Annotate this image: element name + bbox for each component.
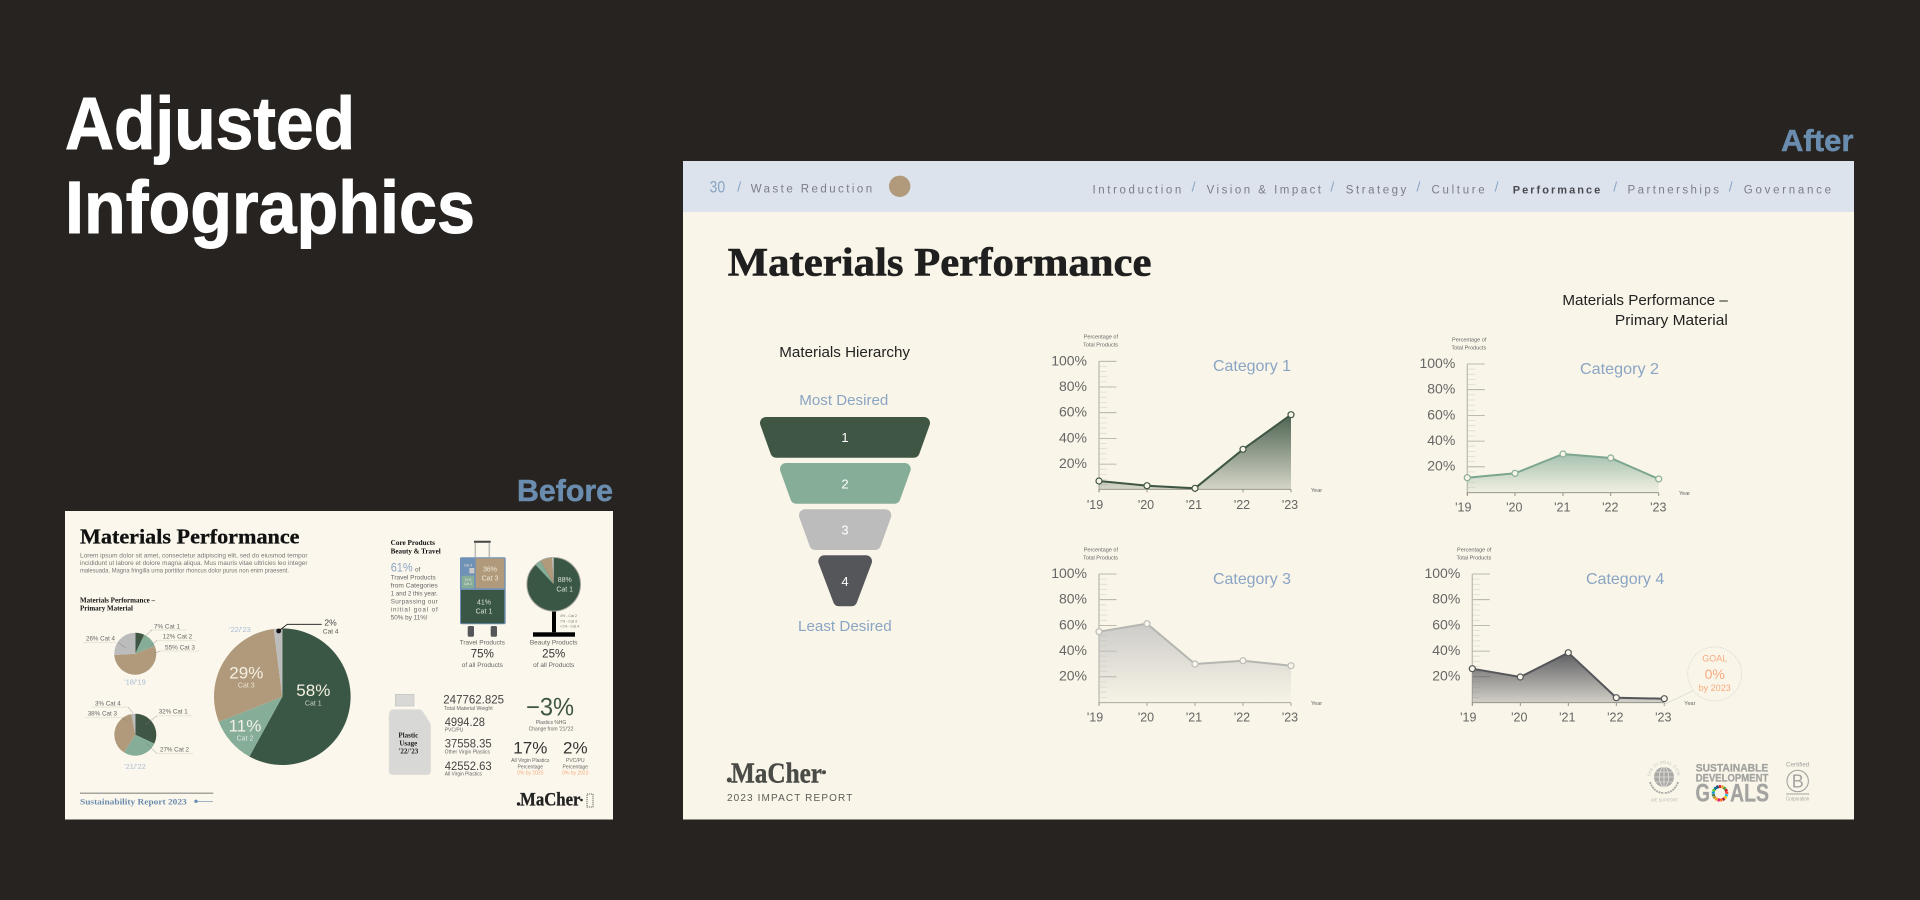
funnel level 1	[766, 423, 924, 452]
line chart: category 1: '21	[1186, 498, 1202, 512]
line chart: category 2: '21	[1554, 501, 1570, 515]
line chart: category 3: '21	[1186, 711, 1202, 725]
plastic percentages: 17%	[513, 738, 547, 757]
line chart: category 2: Category 2	[1580, 361, 1659, 378]
plastic statistics: Other Virgin Plastics	[445, 750, 491, 756]
pie chart: 21/22: 27% Cat 2	[160, 747, 189, 754]
line chart: category 4: 60%	[1432, 616, 1460, 632]
navigation: /	[1330, 178, 1334, 194]
icon: mirror chart	[527, 558, 580, 669]
pie chart: 18/19: '18/'19	[124, 678, 146, 687]
plastic change statistic: −3%	[526, 693, 574, 721]
navigation: Vision & Impact	[1207, 184, 1322, 196]
icon: suitcase chart: 75%	[471, 649, 494, 661]
line chart: category 4: '22	[1607, 711, 1623, 725]
plastic percentages: Percentage	[563, 764, 588, 770]
icon: mirror chart: 7% - Cat 3	[560, 619, 577, 623]
logo: certified b corporation: Corporation	[1786, 796, 1809, 802]
line chart: category 1: 20%	[1059, 455, 1087, 471]
core products text: 61%	[391, 561, 413, 575]
after heading: Materials Performance	[728, 240, 1152, 285]
plastic statistics: 247762.825	[443, 693, 504, 707]
plastic statistics: Total Material Weight	[444, 706, 493, 712]
core products text: Core Products	[391, 539, 435, 547]
core products text: 1 and 2 this year.	[391, 590, 438, 597]
line chart: category 2: Year	[1679, 491, 1690, 497]
logo: global compact: THE GLOBAL COMPACT	[1648, 760, 1680, 777]
line chart: category 4: 100%	[1424, 565, 1460, 581]
header bar: Waste Reduction	[751, 184, 872, 196]
icon: mirror chart: 88%	[558, 577, 572, 584]
navigation	[1092, 178, 1831, 196]
logo: sustainable development goals: ALS	[1730, 779, 1769, 807]
pie chart: 18/19: 12% Cat 2	[163, 634, 193, 641]
materials hierarchy funnel	[766, 344, 924, 635]
icon: mirror chart: <1% - Cat 4	[560, 625, 579, 629]
line chart: category 2: 20%	[1427, 458, 1455, 474]
logo: certified b corporation: Certified	[1786, 762, 1810, 769]
navigation: Strategy	[1346, 184, 1407, 196]
line chart: category 1: 100%	[1051, 352, 1087, 368]
plastic statistics: 42552.63	[445, 759, 492, 773]
line chart: category 2	[1419, 337, 1690, 515]
logo: sustainable development goals: SUSTAINABLE	[1696, 763, 1768, 775]
primary material heading: Primary Material	[1615, 312, 1728, 329]
line chart: category 1: '20	[1138, 498, 1154, 512]
primary material heading: Materials Performance –	[1562, 292, 1728, 309]
pie chart: 21/22: '21/'22	[124, 762, 146, 771]
core products text: of	[415, 567, 421, 574]
icon: mirror chart: 4% - Cat 2	[560, 614, 577, 618]
pie chart: 22/23: Cat 4	[323, 628, 339, 635]
line chart: category 2: Total Products	[1451, 345, 1487, 351]
plastic percentages	[511, 738, 589, 777]
funnel level 3: 3	[841, 523, 849, 538]
logo: global compact	[1648, 760, 1680, 802]
pie chart: 22/23: 2%	[324, 618, 337, 628]
core products text: initial goal of	[391, 607, 438, 614]
header bar: /	[737, 178, 741, 194]
callout: goal	[1663, 647, 1742, 705]
line chart: category 1: '19	[1087, 498, 1103, 512]
navigation: Partnerships	[1628, 184, 1719, 196]
icon: mirror chart: of all Products	[533, 662, 575, 669]
after logo	[727, 758, 852, 804]
callout: goal: 0%	[1705, 666, 1725, 682]
most desired label: Most Desired	[799, 392, 888, 409]
line chart: category 3: '20	[1138, 711, 1154, 725]
line chart: category 3: 60%	[1059, 616, 1087, 632]
navigation: /	[1613, 178, 1617, 194]
pie chart: 18/19: 26% Cat 4	[86, 636, 115, 643]
icon: suitcase chart: Cat 4	[464, 564, 472, 568]
line chart: category 1: Percentage of	[1084, 335, 1118, 341]
line chart: category 2: 60%	[1427, 406, 1455, 422]
line chart: category 1: '22	[1234, 498, 1250, 512]
icon: sdg wheel	[1712, 785, 1728, 801]
line chart: category 4: Year	[1684, 701, 1696, 707]
line chart: category 2: 40%	[1427, 432, 1455, 448]
pie chart: 22/23: '22/'23	[229, 625, 251, 634]
before intro text: incididunt ut labore et dolore magna aliqua. Mus mauris vitae ultricies leo integer	[80, 560, 308, 567]
plastic change statistic: Plastics %HG	[536, 720, 566, 726]
least desired label: Least Desired	[798, 618, 892, 635]
core products text: 50% by 11%!	[391, 614, 428, 621]
callout: goal: by 2023	[1699, 683, 1731, 693]
icon: section dot	[889, 176, 910, 197]
line chart: category 1: 60%	[1059, 404, 1087, 420]
icon: mirror chart: Cat 1	[556, 587, 573, 594]
line chart: category 3: '19	[1087, 711, 1103, 725]
logo: certified b corporation: B	[1792, 772, 1804, 792]
pie chart: 22/23: Cat 1	[305, 700, 322, 707]
plastic percentages: 0% by 2025	[517, 771, 544, 777]
navigation: Culture	[1432, 184, 1485, 196]
line chart: category 3	[1051, 547, 1322, 725]
core products text	[391, 539, 441, 621]
navigation: /	[1729, 178, 1733, 194]
pie chart: 21/22	[85, 700, 193, 771]
before heading: Materials Performance	[80, 524, 300, 548]
line chart: category 4: '19	[1460, 711, 1476, 725]
navigation: /	[1192, 178, 1196, 194]
after logo: MaCher	[731, 758, 822, 789]
line chart: category 3: 40%	[1059, 642, 1087, 658]
pie chart: 18/19: 7% Cat 1	[154, 623, 180, 630]
line chart: category 3: Category 3	[1213, 571, 1291, 588]
callout: goal: GOAL	[1702, 654, 1727, 664]
primary material subheading: Primary Material	[80, 605, 133, 613]
line chart: category 4: 80%	[1432, 590, 1460, 606]
after logo: 2023 IMPACT REPORT	[727, 793, 852, 804]
primary material subheading: Materials Performance –	[80, 597, 155, 605]
before intro text	[80, 552, 308, 574]
heading: after: After	[1781, 123, 1854, 158]
logo: sustainable development goals: DEVELOPMENT	[1696, 773, 1769, 785]
pie chart: 22/23	[214, 618, 351, 765]
plastic percentages: Percentage	[518, 764, 543, 770]
line chart: category 4	[1424, 547, 1696, 725]
funnel level 2	[786, 469, 905, 498]
icon: mirror chart: Beauty Products	[530, 640, 578, 647]
icon: mirror chart: 25%	[542, 649, 565, 661]
primary material subheading	[80, 597, 155, 613]
line chart: category 1: 80%	[1059, 378, 1087, 394]
navigation: /	[1416, 178, 1420, 194]
header bar: 30	[710, 178, 725, 197]
icon: suitcase chart	[460, 542, 506, 669]
navigation: Governance	[1744, 184, 1831, 196]
line chart: category 3: '22	[1234, 711, 1250, 725]
plastic statistics: All Virgin Plastics	[445, 772, 482, 778]
line chart: category 4: 20%	[1432, 668, 1460, 684]
icon: suitcase chart: of all Products	[462, 662, 504, 669]
plastic percentages: 2%	[563, 738, 588, 757]
core products text: Surpassing our	[391, 598, 438, 605]
line chart: category 4: '21	[1559, 711, 1575, 725]
line chart: category 1: '23	[1282, 498, 1298, 512]
pie chart: 22/23: Cat 2	[237, 736, 253, 743]
line chart: category 4: '20	[1511, 711, 1527, 725]
plastic percentages: 0% by 2023	[562, 771, 589, 777]
funnel heading: Materials Hierarchy	[779, 344, 911, 361]
logo: certified b corporation	[1786, 762, 1810, 802]
line chart: category 1: 40%	[1059, 429, 1087, 445]
icon: suitcase chart: 11%	[465, 578, 471, 582]
pie chart: 18/19	[83, 623, 199, 687]
pie chart: 18/19: 55% Cat 3	[165, 644, 196, 651]
plastic statistics: 4994.28	[445, 715, 485, 729]
navigation: Introduction	[1092, 184, 1181, 196]
line chart: category 1	[1051, 335, 1322, 512]
line chart: category 2: 100%	[1419, 355, 1455, 371]
title: Adjusted	[65, 82, 355, 165]
line chart: category 4: Total Products	[1456, 555, 1492, 561]
plastic statistics: PVC/PU	[445, 728, 464, 734]
logo: global compact: WE SUPPORT	[1651, 797, 1678, 802]
plastic percentages: All Virgin Plastics	[511, 758, 550, 764]
funnel level 2: 2	[841, 477, 849, 492]
before footer: Sustainability Report 2023	[80, 798, 187, 807]
core products text: from Categories	[391, 582, 438, 590]
line chart: category 4: 40%	[1432, 642, 1460, 658]
funnel level 4: 4	[841, 574, 849, 589]
icon: suitcase chart: 36%	[483, 566, 497, 573]
logo: sustainable development goals	[1696, 763, 1769, 807]
header bar	[683, 161, 1854, 212]
pie chart: 22/23: 11%	[229, 717, 261, 736]
pie chart: 21/22: 32% Cat 1	[159, 708, 188, 715]
navigation: /	[1495, 178, 1499, 194]
before intro text: Lorem ipsum dolor sit amet, consectetur adipiscing elit, sed do eiusmod tempor	[80, 552, 308, 559]
icon: plastic bottle: Usage	[399, 739, 417, 747]
before logo: MaCher	[520, 790, 581, 811]
funnel level 3	[805, 515, 885, 544]
plastic statistics	[443, 693, 504, 778]
icon: suitcase chart: Travel Products	[460, 640, 506, 647]
before footer	[80, 793, 213, 807]
plastic change statistic	[526, 693, 574, 733]
heading: before: Before	[517, 473, 613, 508]
icon: suitcase chart: Cat 1	[476, 609, 492, 616]
line chart: category 2: 80%	[1427, 380, 1455, 396]
line chart: category 3: 80%	[1059, 590, 1087, 606]
icon: suitcase chart: Cat 3	[482, 575, 498, 582]
title	[65, 82, 475, 249]
line chart: category 1: Category 1	[1213, 358, 1291, 375]
core products text: Travel Products	[391, 574, 436, 581]
line chart: category 2: '19	[1455, 501, 1471, 515]
line chart: category 3: '23	[1282, 711, 1298, 725]
primary material heading	[1562, 292, 1728, 329]
icon: plastic bottle: '22/'23	[398, 747, 419, 755]
funnel level 4	[824, 561, 866, 600]
icon: plastic bottle: Plastic	[398, 731, 418, 739]
pie chart: 22/23: Cat 3	[238, 682, 255, 689]
plastic change statistic: Change from '21/'22	[529, 727, 574, 733]
plastic statistics: 37558.35	[445, 737, 492, 751]
pie chart: 22/23: 58%	[296, 681, 330, 700]
plastic percentages: PVC/PU	[566, 758, 585, 764]
line chart: category 1: Total Products	[1083, 343, 1118, 349]
line chart: category 4: Category 4	[1586, 571, 1664, 588]
line chart: category 2: '23	[1650, 501, 1666, 515]
pie chart: 22/23: 29%	[229, 663, 263, 682]
navigation: Performance	[1513, 184, 1600, 196]
icon: suitcase chart: 41%	[477, 600, 491, 607]
icon: suitcase chart: Cat 2	[464, 582, 472, 586]
line chart: category 3: Total Products	[1083, 555, 1118, 561]
title: Infographics	[65, 166, 475, 249]
panel: before infographic	[65, 511, 613, 820]
icon: plastic bottle	[389, 694, 431, 775]
line chart: category 3: Year	[1311, 701, 1322, 707]
line chart: category 1: Year	[1311, 488, 1322, 494]
before intro text: malesuada. Magna fringilla urna porttitor rhoncus dolor purus non enim praesent.	[80, 567, 289, 574]
line chart: category 3: 100%	[1051, 565, 1087, 581]
funnel level 1: 1	[841, 430, 849, 445]
line chart: category 4: Percentage of	[1457, 547, 1492, 553]
line chart: category 2: '22	[1602, 501, 1618, 515]
line chart: category 4: '23	[1655, 711, 1671, 725]
pie chart: 21/22: 38% Cat 3	[88, 711, 117, 718]
logo: sustainable development goals: G	[1696, 779, 1710, 807]
line chart: category 2: Percentage of	[1452, 337, 1487, 343]
pie chart: 21/22: 3% Cat 4	[95, 700, 121, 707]
line chart: category 3: Percentage of	[1084, 547, 1118, 553]
line chart: category 2: '20	[1506, 501, 1522, 515]
line chart: category 3: 20%	[1059, 668, 1087, 684]
core products text: Beauty & Travel	[391, 547, 441, 555]
